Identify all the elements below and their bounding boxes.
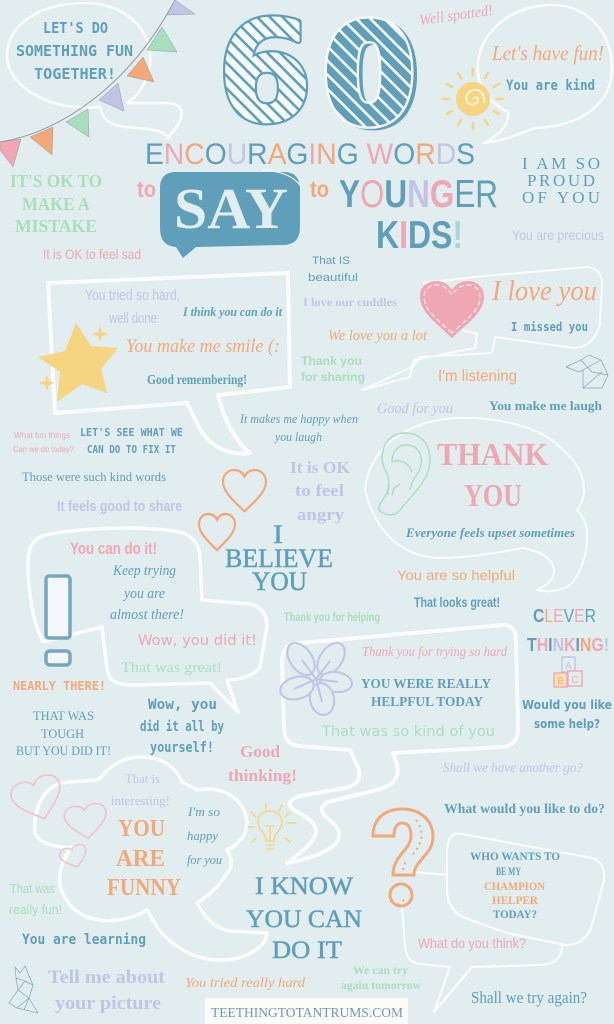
- text: you are funny: [107, 816, 181, 901]
- text: that looks great: That looks great!: [414, 594, 500, 610]
- text: thank you for sharing: for sharing: [301, 370, 365, 384]
- text: let's have fun: Let's have fun!: [491, 41, 604, 65]
- text: what do you think: What do you think?: [418, 935, 526, 951]
- text: who wants to be my champion helper today: [470, 851, 560, 921]
- text: that is beautiful: That IS: [312, 255, 350, 267]
- text: that is beautiful: [308, 255, 358, 284]
- text: it's ok to make a mistake: [10, 171, 102, 236]
- text: you tried really hard: You tried really hard: [185, 976, 306, 991]
- bubble outline: [362, 267, 602, 390]
- text: I think you can do it: I think you can do it: [182, 304, 282, 319]
- bubble text: [16, 19, 133, 83]
- text: thank you: YOU: [464, 477, 522, 513]
- text: it feels good to share: It feels good to share: [57, 498, 182, 515]
- text: it is ok to feel angry: angry: [297, 505, 345, 524]
- text: what fun things: Can we do today?: [13, 444, 74, 454]
- text: keep trying you are almost there: you are: [122, 586, 165, 602]
- text: it's ok to make a mistake: MISTAKE: [15, 216, 97, 236]
- footer: website badge: TEETHINGTOTANTRUMS.COM: [211, 1005, 403, 1020]
- text: I am so proud of you: I AM SO: [522, 154, 600, 173]
- text: what would you like to do: What would you like to do?: [444, 801, 605, 816]
- text: who wants to be my champion helper today: CHAMPION: [484, 881, 546, 893]
- text: I believe you: I: [273, 520, 283, 549]
- text: I know you can do it: I KNOW: [255, 873, 353, 900]
- text: I believe you: BELIEVE: [225, 544, 333, 573]
- text: everyone feels upset sometimes: Everyone feels upset sometimes: [405, 525, 575, 540]
- text: wow you did it all by yourself: did it all by: [140, 719, 224, 735]
- text: that was great: That was great!: [121, 660, 222, 676]
- text: that was tough but you did it: BUT YOU DID IT!: [16, 743, 111, 758]
- text: thank you: [437, 436, 548, 513]
- text: I missed you: I missed you: [511, 319, 588, 334]
- text: we can try again tomorrow: again tomorrow: [341, 980, 422, 992]
- panel: question speech bubbles: [373, 809, 604, 1012]
- text: thank you for helping: Thank you for helping: [284, 610, 380, 624]
- panel: flower speech bubble: [278, 625, 518, 863]
- text: wow you did it all by yourself: Wow, you: [148, 697, 217, 713]
- text: you were really helpful today: [361, 677, 491, 710]
- icon: sun: [443, 69, 503, 129]
- text: it is ok to feel angry: It is OK: [290, 458, 351, 477]
- text: it is ok to feel sad: It is OK to feel sad: [43, 246, 141, 262]
- text: keep trying you are almost there: [110, 563, 184, 623]
- text: it makes me happy when you laugh: [239, 412, 358, 444]
- text: I am so proud of you: [522, 154, 600, 207]
- text: I am so proud of you: OF YOU: [522, 188, 600, 207]
- text: we love you a lot: We love you a lot: [328, 328, 428, 344]
- text: I'm so happy for you: I'm so: [187, 804, 221, 819]
- text: you were really helpful today: YOU WERE REALLY: [361, 677, 491, 692]
- bubble outline: [28, 528, 267, 712]
- bubble outline: [282, 625, 518, 863]
- text: good thinking: Good: [240, 742, 281, 761]
- text: well spotted: Well spotted!: [418, 3, 494, 29]
- text: you make me laugh: You make me laugh: [489, 398, 603, 413]
- bubble text: TOGETHER!: [34, 65, 116, 83]
- text: keep trying you are almost there: Keep trying: [112, 563, 176, 579]
- icon: alphabet blocks: A: [565, 661, 572, 672]
- text: tell me about your picture: [48, 967, 166, 1014]
- text: let's see what we can do: [80, 426, 183, 456]
- icon: alphabet blocks: C: [571, 675, 579, 686]
- SAY speech badge: [160, 170, 301, 258]
- text: keep trying you are almost there: almost there!: [110, 607, 184, 623]
- bubble outline: [35, 757, 267, 960]
- text: that is interesting: [111, 772, 170, 808]
- panel: thank you bubble: [365, 418, 587, 591]
- text: you are funny: FUNNY: [107, 875, 181, 901]
- text: good thinking: [228, 742, 297, 785]
- text: thank you for sharing: Thank you: [301, 354, 362, 368]
- bubble outline: [7, 3, 181, 138]
- title line: encouraging words: ENCOURAGING WORDS: [145, 138, 475, 171]
- text: let's see what we can do: CAN DO TO FIX IT: [87, 443, 176, 456]
- headline number 60: 0: [327, 0, 419, 157]
- text: good for you: Good for you: [377, 401, 453, 417]
- text: that was tough but you did it: THAT WAS: [33, 708, 94, 723]
- text: it is ok to feel angry: [290, 458, 351, 524]
- headline number 60: [218, 0, 419, 157]
- icon: ear: [379, 433, 430, 515]
- icon: orange hearts: [199, 470, 266, 550]
- text: you tried so hard: well done: [108, 310, 157, 327]
- text: who wants to be my champion helper today: WHO WANTS TO: [470, 851, 560, 863]
- text: that was so kind of you: That was so kind of you: [321, 724, 495, 740]
- panel: star speech bubble: [38, 273, 290, 454]
- connector line: [414, 872, 447, 875]
- text: who wants to be my champion helper today: HELPER: [492, 895, 539, 907]
- text: you tried so hard: You tried so hard,: [85, 287, 180, 304]
- text: nearly there: NEARLY THERE!: [13, 679, 106, 693]
- bubble outline: lower: [402, 907, 562, 1012]
- bubble outline: upper: [447, 834, 604, 945]
- text: that was really fun: [9, 882, 62, 917]
- text: tell me about your picture: your picture: [55, 993, 161, 1014]
- icon: origami fox: [9, 966, 38, 1013]
- icon: origami outline: [566, 355, 608, 388]
- text: it is ok to feel angry: to feel: [295, 481, 344, 500]
- text: shall we try again: Shall we try again?: [471, 988, 587, 1007]
- text: let's see what we can do: LET'S SEE WHAT WE: [80, 426, 183, 439]
- text: wow you did it: Wow, you did it!: [138, 633, 257, 649]
- text: I know you can do it: DO IT: [272, 937, 342, 964]
- word: to (orange): to: [310, 176, 329, 202]
- icon: pink heart: [420, 281, 484, 338]
- text: would you like some help: some help?: [534, 716, 600, 731]
- text: I love you: I love you: [491, 275, 597, 307]
- headline number 60: 0: [323, 0, 415, 155]
- text: wow you did it all by yourself: [140, 697, 224, 756]
- text: you tried so hard: [85, 287, 180, 327]
- text: you were really helpful today: HELPFUL TODAY: [371, 695, 483, 710]
- text: you are funny: ARE: [116, 846, 165, 872]
- panel: heart speech bubble: [362, 267, 602, 390]
- text: thank you: THANK: [437, 436, 548, 472]
- text: you are so helpful: You are so helpful: [397, 567, 515, 583]
- text: that is beautiful: beautiful: [308, 272, 358, 284]
- word: to (pink): to: [137, 176, 156, 202]
- text: clever thinking: THINKING!: [527, 635, 609, 655]
- text: I'm so happy for you: for you: [187, 852, 222, 867]
- text: who wants to be my champion helper today: BE MY: [496, 866, 521, 878]
- bubble text: SOMETHING FUN: [16, 42, 133, 60]
- text: we can try again tomorrow: [341, 965, 422, 992]
- text: that was really fun: That was: [10, 882, 55, 896]
- text: it makes me happy when you laugh: you laugh: [273, 430, 322, 444]
- panel: top left speech bubble: [7, 3, 181, 138]
- text: those were such kind words: Those were such kind words: [22, 469, 166, 484]
- icon: question mark: [373, 809, 433, 906]
- text: you are precious: You are precious: [512, 227, 604, 243]
- text: clever thinking: CLEVER: [533, 606, 596, 626]
- text: would you like some help: [522, 697, 612, 731]
- bunting flags: [0, 0, 195, 167]
- text: I'm so happy for you: happy: [187, 828, 218, 843]
- text: I believe you: YOU: [252, 567, 307, 596]
- bubble text: LET'S DO: [43, 19, 108, 37]
- bubble outline: [365, 418, 587, 591]
- footer: website badge: [205, 998, 408, 1024]
- text: I'm listening: I'm listening: [438, 368, 517, 385]
- icon: alphabet blocks: B: [557, 676, 564, 687]
- text: you can do it: You can do it!: [70, 539, 157, 558]
- text: who wants to be my champion helper today: TODAY?: [493, 909, 537, 921]
- text: thank you for sharing: [301, 354, 365, 384]
- text: it's ok to make a mistake: MAKE A: [22, 194, 90, 214]
- text: you are kind: You are kind: [506, 78, 595, 94]
- panel: top right speech bubble: [443, 5, 612, 143]
- icon: flower: [278, 638, 353, 717]
- icon: exclamation mark: [46, 576, 70, 665]
- bubble outline: [48, 273, 290, 454]
- icon: star: [38, 323, 118, 402]
- text: I love our cuddles: I love our cuddles: [303, 295, 397, 309]
- text: I believe you: [225, 520, 333, 596]
- headline number 60: 0: [323, 0, 415, 155]
- text: that is interesting: interesting!: [111, 794, 170, 808]
- text: that is interesting: That is: [125, 772, 160, 786]
- text: good remembering: Good remembering!: [147, 373, 247, 388]
- icon: pink outline hearts: [8, 772, 109, 871]
- title line: kids: KIDS!: [376, 214, 463, 257]
- text: what fun things: [13, 430, 74, 454]
- text: that was tough but you did it: [16, 708, 111, 758]
- text: good thinking: thinking!: [228, 766, 297, 785]
- text: it's ok to make a mistake: IT'S OK TO: [10, 171, 102, 191]
- icon: light bulb: [248, 804, 296, 849]
- text: you are learning: You are learning: [22, 932, 146, 948]
- SAY speech badge: SAY: [174, 176, 288, 241]
- text: it makes me happy when you laugh: It makes me happy when: [239, 412, 358, 426]
- panel: cloud speech bubble: [8, 757, 267, 960]
- text: clever thinking: [527, 606, 609, 655]
- text: you are funny: YOU: [118, 816, 165, 842]
- icon: alphabet blocks: [554, 657, 582, 687]
- text: that was really fun: really fun!: [9, 903, 62, 917]
- text: thank you for trying so hard: Thank you for trying so hard: [362, 644, 507, 659]
- text: that was tough but you did it: TOUGH: [41, 726, 84, 741]
- text: I'm so happy for you: [187, 804, 222, 867]
- title line: younger: YOUNGER: [339, 173, 498, 216]
- text: you make me smile: You make me smile (:: [126, 336, 280, 357]
- text: I know you can do it: YOU CAN: [246, 906, 362, 933]
- panel: exclamation speech bubble: [28, 528, 267, 712]
- text: tell me about your picture: Tell me about: [48, 967, 166, 988]
- bubble outline: [478, 5, 612, 143]
- text: we can try again tomorrow: We can try: [353, 965, 408, 977]
- text: what fun things: What fun things: [14, 430, 70, 440]
- text: I know you can do it: [246, 873, 362, 964]
- text: I am so proud of you: PROUD: [527, 171, 595, 190]
- text: shall we have another go: Shall we have another go?: [443, 761, 583, 776]
- text: wow you did it all by yourself: yourself!: [150, 740, 214, 756]
